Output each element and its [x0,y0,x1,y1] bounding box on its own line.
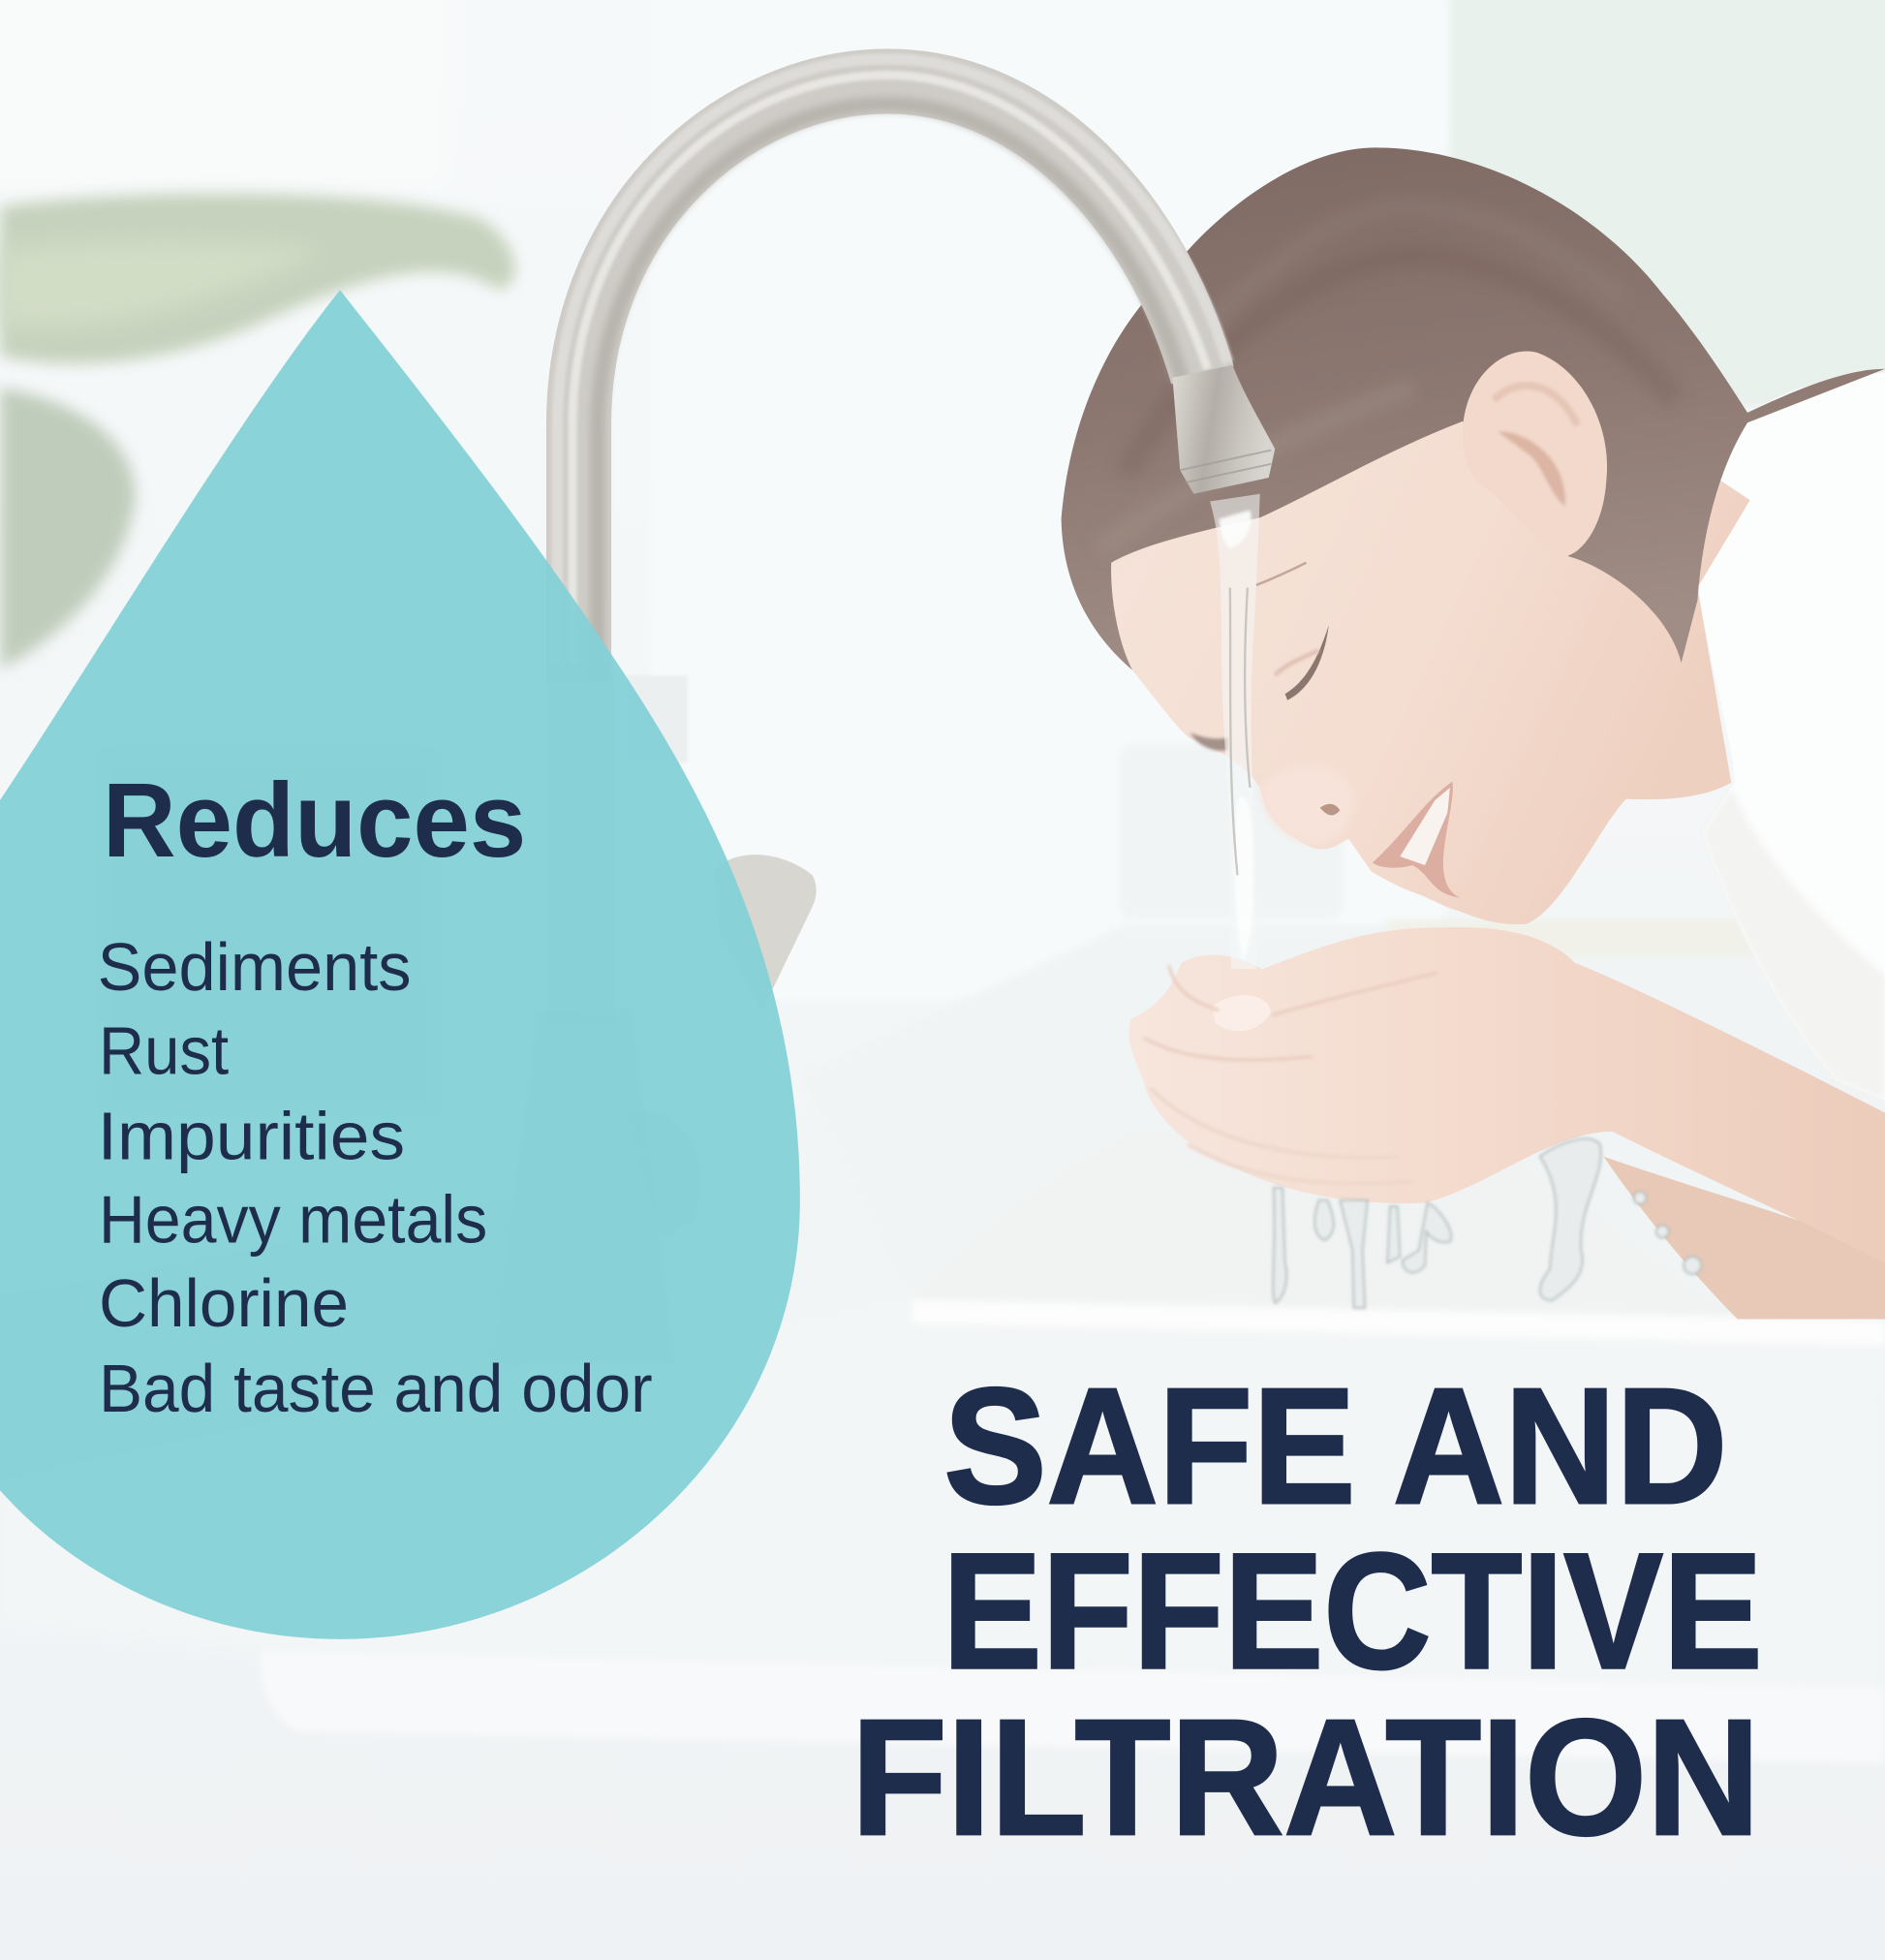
heading: Reduces: Reduces [103,762,526,879]
list of contaminants: Rust [99,1013,229,1089]
list of contaminants: Sediments [98,929,412,1005]
faucet lever handle [715,855,817,1011]
list of contaminants: Impurities [98,1098,405,1173]
arm and cupped hands [1128,927,1885,1262]
list of contaminants: Chlorine [99,1265,349,1341]
faucet base [494,1007,675,1363]
list of contaminants [98,929,653,1426]
face and neck [1111,375,1750,924]
nose [1260,765,1354,844]
teal water drop panel [0,290,800,1639]
second arm [1604,1157,1885,1319]
title: safe and effective filtration [851,1354,1763,1870]
eyebrow [1256,563,1307,585]
water drips [1273,1138,1701,1308]
title: safe and effective filtration: FILTRATION [851,1686,1760,1870]
title: safe and effective filtration: EFFECTIVE [942,1520,1763,1704]
ear [1463,351,1607,556]
list of contaminants: Heavy metals [99,1182,487,1258]
closed eyes [1190,625,1329,751]
hair strands [1100,206,1675,550]
sink basin [912,1125,1885,1346]
water stream [1210,494,1260,969]
title: safe and effective filtration: SAFE AND [943,1354,1727,1539]
list of contaminants: Bad taste and odor [99,1351,653,1426]
faucet nozzle [1172,365,1275,494]
blurred plant leaves [0,194,515,669]
smile [1373,782,1460,898]
t-shirt [1697,373,1885,1101]
hair [1062,147,1885,670]
faucet [0,59,1275,1476]
girl washing face [1062,147,1885,1319]
